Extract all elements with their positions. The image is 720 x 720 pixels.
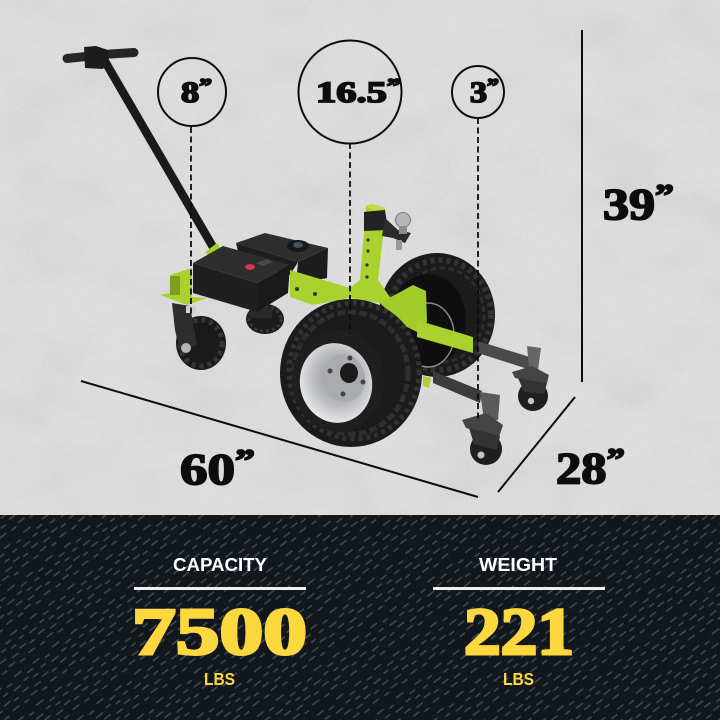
handle bar — [67, 46, 221, 257]
green frame — [160, 204, 473, 353]
capacity divider — [134, 587, 306, 590]
callout: 8 inch: ” — [199, 74, 212, 98]
dimension: height 39 inches — [582, 30, 674, 382]
capacity unit: LBS — [204, 669, 235, 689]
weight unit: LBS — [503, 669, 534, 689]
callout: 16.5 inch — [298, 40, 402, 144]
weight label: WEIGHT — [479, 554, 558, 575]
callout: 16.5 inch: ” — [387, 74, 401, 98]
wheel rim and hub — [292, 336, 380, 430]
dark stats panel background — [0, 515, 720, 720]
callout: 8 inch: 8 — [181, 76, 196, 109]
dashed leader: 8 inch wheel — [190, 127, 192, 315]
dashed leader: 3 inch wheel — [477, 118, 479, 420]
rear small caster wheel — [246, 304, 284, 334]
dimension: width 28 inches — [498, 397, 625, 493]
callout: 3 inch: 3 — [470, 76, 485, 109]
product: electric tugger — [67, 46, 549, 465]
large front wheel — [280, 299, 422, 447]
dimension: length 60 inches — [81, 381, 478, 497]
capacity label: CAPACITY — [173, 554, 268, 575]
rear wheel — [379, 253, 495, 377]
trailer hitch ball mount — [364, 210, 411, 250]
dimension: width 28 inches: 28 — [556, 444, 600, 493]
dashed leader: 16.5 inch wheel — [349, 143, 351, 334]
support arm and caster right — [478, 341, 549, 411]
support arm and caster front — [423, 371, 503, 465]
callout: 16.5 inch: 16.5 — [316, 76, 368, 109]
stat: weight — [433, 554, 605, 689]
capacity value: 7500 — [132, 595, 307, 669]
battery box front with switches — [193, 246, 290, 312]
weight divider — [433, 587, 605, 590]
weight value: 221 — [464, 595, 574, 669]
dimension: height 39 inches: 39 — [603, 180, 647, 229]
battery box rear — [236, 233, 328, 284]
dimension: width 28 inches: ” — [607, 441, 625, 477]
dimension: length 60 inches: 60 — [180, 445, 224, 494]
front caster assembly left — [172, 303, 226, 370]
dimension: length 60 inches: ” — [235, 442, 255, 478]
dimension: height 39 inches: ” — [655, 177, 674, 213]
concrete background panel — [0, 0, 720, 516]
stat: capacity — [132, 554, 307, 689]
callout: 3 inch — [452, 66, 504, 118]
callout: 8 inch — [158, 58, 226, 126]
callout: 3 inch: ” — [487, 74, 499, 98]
